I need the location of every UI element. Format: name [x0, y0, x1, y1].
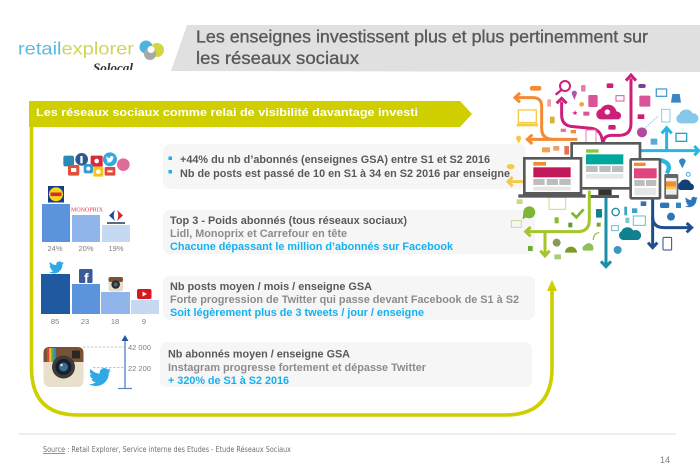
arrows: magenta — [557, 75, 636, 143]
label: Monoprix logo: MONOPRIX — [71, 206, 103, 214]
text block: posts: Nb posts moyen / mois / enseigne GSA — [170, 281, 372, 293]
chart: average posts per month: 23 — [81, 317, 89, 326]
icon: Instagram large — [44, 347, 84, 387]
chart: average posts per month: 85 — [51, 317, 59, 326]
logo: retailexplorer Solocal: Solocal — [93, 60, 133, 75]
panel frame: yellow arrow outline — [32, 127, 557, 415]
page number: 14 — [660, 455, 670, 465]
text block: posts: Forte progression de Twitter qui passe devant Facebook de S1 à S2 — [170, 294, 519, 306]
text block: top 3: Lidl, Monoprix et Carrefour en tête — [170, 228, 347, 240]
text block: top 3: Chacune dépassant le million d’abonnés sur Facebook — [170, 241, 454, 253]
chart: average posts per month — [41, 261, 159, 326]
icon: Carrefour logo — [107, 210, 125, 224]
text block: subscribers — [160, 342, 532, 387]
section heading banner — [29, 101, 472, 127]
arrows: cyan — [641, 128, 699, 173]
logo: retailexplorer Solocal — [19, 40, 164, 70]
chart: average posts per month: 18 — [111, 317, 119, 326]
chart: top 3 share of subscribers: 19% — [108, 244, 124, 253]
text block: key figures: Nb de posts est passé de 10 en S1 à 34 en S2 2016 par enseigne — [180, 168, 510, 180]
text block: key figures: +44% du nb d’abonnés (enseignes GSA) entre S1 et S2 2016 — [180, 154, 490, 166]
text block: subscribers: + 320% de S1 à S2 2016 — [168, 375, 289, 387]
arrows: orange — [515, 93, 577, 144]
icon: YouTube — [137, 289, 152, 299]
chart: top 3 share of subscribers: 24% — [47, 244, 63, 253]
chart: average subscribers scale: 42 000 — [128, 343, 151, 352]
device: desktop monitor — [572, 143, 640, 198]
title band: les réseaux sociaux — [196, 48, 359, 68]
illustration: connected devices with coloured arrows — [507, 75, 699, 267]
title band — [171, 25, 700, 72]
chart: average subscribers scale: 22 200 — [128, 364, 151, 373]
section heading banner: Les réseaux sociaux comme relai de visibilité davantage investi — [36, 107, 418, 119]
text block: key figures — [163, 144, 526, 189]
chart: average subscribers scale — [83, 335, 151, 388]
text block: posts: Soit légèrement plus de 3 tweets / jour / enseigne — [170, 307, 424, 319]
text block: subscribers: Nb abonnés moyen / enseigne GSA — [168, 348, 350, 360]
device: smartphone — [664, 174, 678, 199]
arrows: green — [526, 191, 589, 256]
footer rule — [19, 433, 676, 435]
icon: Instagram small — [108, 277, 123, 292]
chart: top 3 share of subscribers: 20% — [78, 244, 94, 253]
source note: Source : Retail Explorer, Service interne des Etudes - Etude Réseaux Sociaux — [43, 445, 291, 454]
device: laptop — [518, 158, 586, 198]
arrow: yellow — [508, 177, 523, 186]
icons: small pictograms — [507, 81, 698, 259]
chart: top 3 share of subscribers — [42, 186, 130, 253]
icon: Facebook: f — [84, 270, 89, 286]
device: tablet — [631, 159, 660, 198]
text block: top 3 — [163, 210, 535, 254]
arrows: navy — [648, 198, 692, 248]
icon: Lidl logo — [48, 186, 64, 202]
icon: social media cluster — [63, 152, 130, 177]
arrow: teal — [601, 197, 611, 267]
chart: average posts per month: 9 — [142, 317, 146, 326]
text block: top 3: Top 3 - Poids abonnés (tous réseaux sociaux) — [170, 215, 407, 227]
icon: Twitter bird large — [89, 368, 111, 386]
logo: retailexplorer Solocal: retail explorer — [18, 38, 134, 58]
text block: posts — [163, 276, 535, 320]
text block: subscribers: Instagram progresse fortement et dépasse Twitter — [168, 362, 427, 374]
icon: Twitter bird — [49, 261, 64, 273]
title band: Les enseignes investissent plus et plus pertinemment sur — [196, 26, 648, 46]
